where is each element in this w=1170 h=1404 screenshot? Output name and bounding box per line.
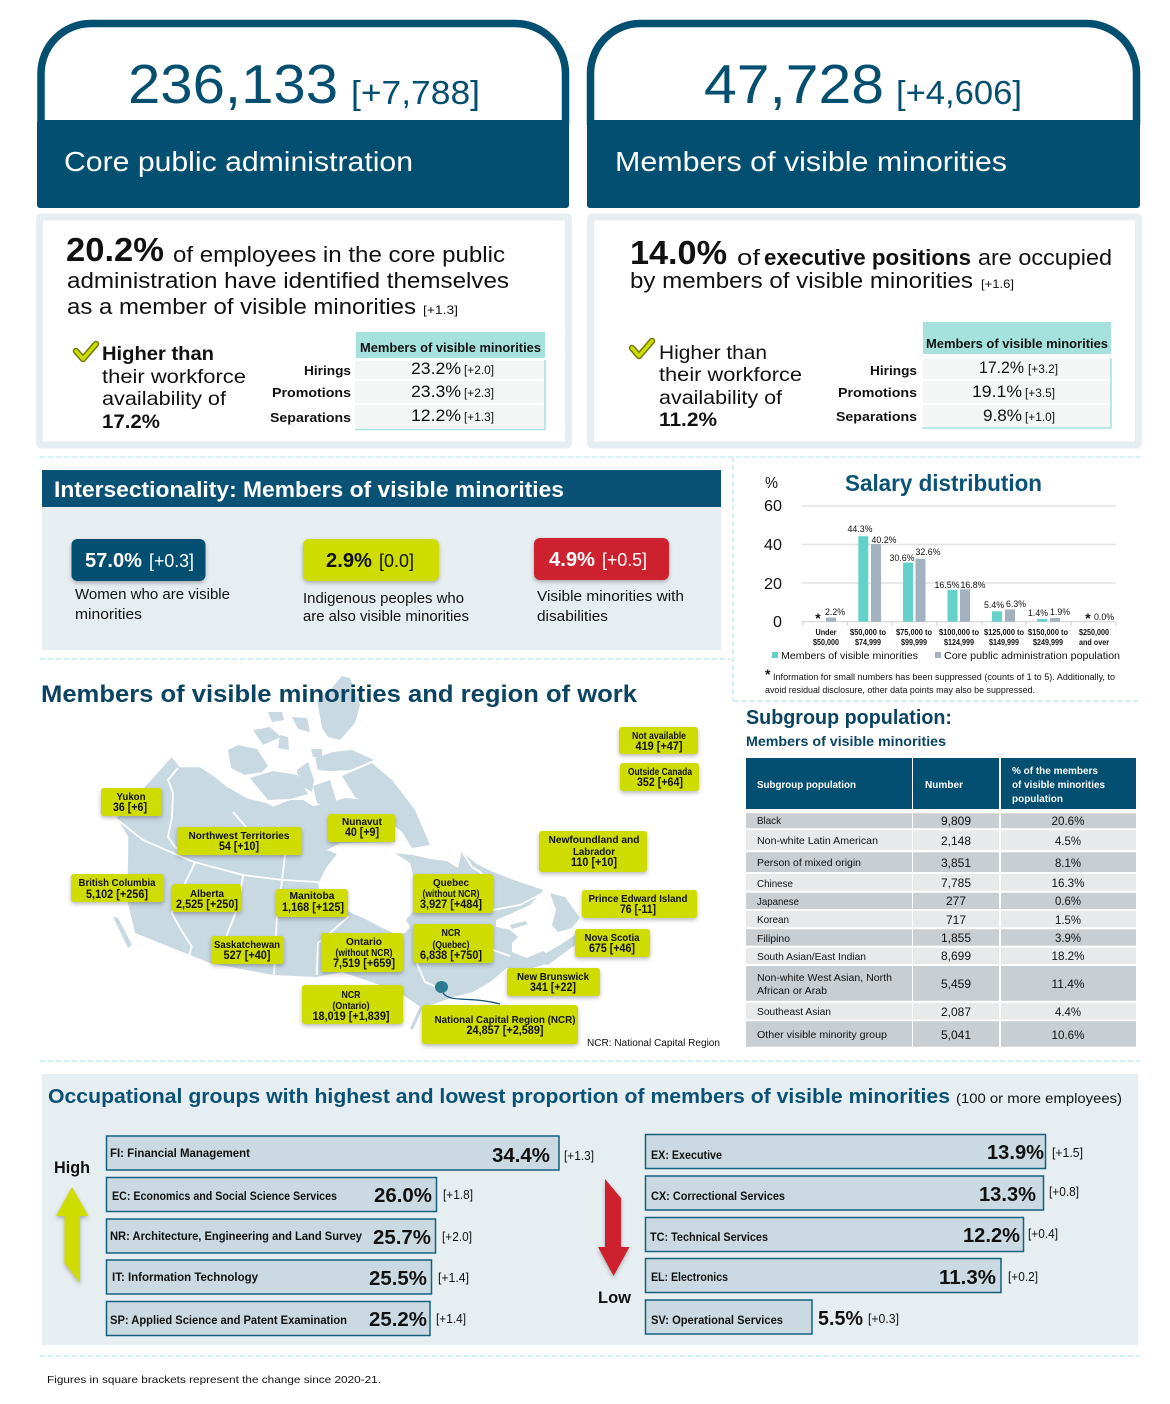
table: subgroups: 10.6% bbox=[1052, 1028, 1085, 1042]
table: subgroups: 18.2% bbox=[1052, 949, 1085, 963]
label: National Capital Region bbox=[422, 1005, 578, 1044]
bar chart: 40 bbox=[764, 537, 782, 554]
label: National Capital Region: National Capital Region (NCR) bbox=[434, 1015, 576, 1026]
footnote: avoid residual disclosure, other data points may also be suppressed. bbox=[765, 685, 1035, 695]
table: subgroups: Other visible minority group bbox=[757, 1029, 887, 1041]
label: Saskatchewan: Saskatchewan bbox=[214, 940, 280, 951]
text block: share of employees bbox=[66, 231, 509, 319]
label: Nunavut: 40 [+9] bbox=[345, 827, 379, 839]
bar chart: highest groups: 26.0% bbox=[374, 1185, 432, 1207]
footnote: Information for small numbers has been suppressed (counts of 1 to 5). Additionally, to bbox=[773, 672, 1115, 682]
stat change: [+7,788] bbox=[351, 74, 480, 111]
label: not available bbox=[619, 727, 698, 754]
footnote: * bbox=[765, 666, 771, 682]
label: not available: 419 [+47] bbox=[636, 741, 683, 753]
stat change: [+4,606] bbox=[896, 74, 1022, 111]
legend: Members of visible minorities bbox=[781, 651, 918, 662]
map of Canada bbox=[113, 676, 580, 1030]
label: Manitoba: Manitoba bbox=[290, 891, 335, 902]
legend: Core public administration population bbox=[944, 651, 1120, 662]
table: hirings promotions separations: Promotions bbox=[272, 386, 351, 400]
table: subgroups: Southeast Asian bbox=[757, 1006, 831, 1018]
table: hirings promotions separations: Hirings bbox=[870, 364, 917, 378]
label: NCR Ontario: 18,019 [+1,839] bbox=[312, 1011, 390, 1023]
bar chart: * bbox=[1085, 610, 1091, 626]
text block: workforce availability: availability of bbox=[102, 388, 227, 410]
heading bbox=[746, 706, 952, 749]
bar chart: $50,000 bbox=[813, 638, 839, 647]
label: NCR Quebec: (Quebec) bbox=[432, 940, 470, 951]
table: hirings promotions separations: [+3.2] bbox=[1028, 364, 1058, 376]
text block: share of executive positions: of bbox=[737, 245, 761, 270]
table: subgroups: 5,459 bbox=[941, 977, 971, 991]
table: subgroups: Korean bbox=[757, 914, 789, 926]
text block: share of executive positions: executive positions bbox=[764, 245, 971, 270]
bar chart: lowest groups: TC: Technical Services bbox=[650, 1230, 768, 1244]
bar chart: $75,000 to bbox=[896, 628, 932, 637]
bar chart: % bbox=[765, 475, 778, 492]
bar chart: $124,999 bbox=[944, 638, 974, 647]
table: subgroups: African or Arab bbox=[757, 985, 827, 997]
table: subgroups: 277 bbox=[946, 894, 966, 908]
bar chart: 6.3% bbox=[1006, 599, 1027, 610]
label: Nunavut: Nunavut bbox=[342, 817, 383, 828]
label: NCR Ontario: (Ontario) bbox=[332, 1001, 370, 1012]
text block: workforce availability bbox=[659, 342, 802, 431]
table: hirings promotions separations bbox=[836, 322, 1111, 428]
text block: workforce availability: Higher than bbox=[659, 342, 767, 364]
bar chart: highest groups: 25.7% bbox=[373, 1227, 431, 1249]
heading: (100 or more employees) bbox=[956, 1091, 1122, 1106]
label: NCR Ontario: NCR bbox=[342, 990, 361, 1001]
stat: disabilities bbox=[534, 538, 684, 625]
table: subgroups: Person of mixed origin bbox=[757, 857, 861, 869]
label: NCR Ontario bbox=[302, 985, 403, 1024]
table: subgroups: 20.6% bbox=[1052, 814, 1085, 828]
label: British Columbia: British Columbia bbox=[78, 878, 156, 889]
table: hirings promotions separations: [+2.3] bbox=[464, 388, 494, 400]
bar chart: $150,000 to bbox=[1028, 628, 1068, 637]
label: Nova Scotia: Nova Scotia bbox=[584, 933, 640, 944]
dividers bbox=[40, 457, 1140, 1356]
table: subgroups: Number bbox=[925, 779, 963, 791]
bar chart: highest groups bbox=[106, 1136, 594, 1336]
bar chart: Under bbox=[816, 628, 836, 637]
bar chart: 1.4% bbox=[1028, 608, 1049, 619]
bar chart: $249,999 bbox=[1033, 638, 1063, 647]
bar chart: $99,999 bbox=[901, 638, 927, 647]
table: subgroups: South Asian/East Indian bbox=[757, 951, 866, 963]
stat: disabilities: [+0.5] bbox=[602, 550, 647, 570]
bar chart: 40.2% bbox=[872, 535, 897, 546]
label: Quebec: Quebec bbox=[433, 878, 469, 889]
table: subgroups: 4.4% bbox=[1055, 1005, 1081, 1019]
label: NCR Quebec: 6,838 [+750] bbox=[420, 950, 482, 962]
heading: Members of visible minorities bbox=[615, 146, 1007, 177]
table: subgroups: % of the members bbox=[1012, 765, 1098, 777]
table: subgroups: Subgroup population bbox=[757, 779, 856, 791]
stat: indigenous peoples: 2.9% bbox=[326, 550, 372, 572]
table: hirings promotions separations: 12.2% bbox=[411, 406, 461, 425]
label: Nova Scotia: 675 [+46] bbox=[589, 943, 635, 955]
bar chart: 0 bbox=[773, 614, 782, 631]
panel: core public administration header bbox=[37, 24, 569, 208]
stat: women: [+0.3] bbox=[149, 551, 194, 571]
text block: share of executive positions bbox=[630, 234, 1112, 293]
table: subgroups: Non-white Latin American bbox=[757, 835, 878, 847]
table: hirings promotions separations: Members of visible minorities bbox=[926, 337, 1108, 351]
label: Newfoundland and Labrador: Newfoundland and bbox=[548, 835, 640, 846]
table: subgroups: 8.1% bbox=[1055, 856, 1081, 870]
arrow: up bbox=[56, 1187, 88, 1283]
note: NCR abbreviation: NCR: National Capital Region bbox=[587, 1038, 720, 1049]
bar chart: highest groups: 34.4% bbox=[492, 1145, 550, 1167]
label: Yukon: Yukon bbox=[116, 792, 146, 803]
bar chart: lowest groups: SV: Operational Services bbox=[651, 1313, 783, 1327]
table: subgroups: 16.3% bbox=[1052, 876, 1085, 890]
table: subgroups: 1,855 bbox=[941, 931, 971, 945]
table: subgroups: 3.9% bbox=[1055, 931, 1081, 945]
table: hirings promotions separations: Members of visible minorities bbox=[360, 341, 541, 355]
table: subgroups: 717 bbox=[946, 913, 966, 927]
label: low: Low bbox=[598, 1289, 631, 1307]
bar chart: 5.4% bbox=[984, 600, 1005, 611]
label: Alberta: Alberta bbox=[190, 889, 224, 900]
bar chart: 2.2% bbox=[825, 607, 846, 618]
label: not available: Not available bbox=[632, 731, 686, 742]
table: hirings promotions separations: [+3.5] bbox=[1025, 388, 1055, 400]
bar chart: lowest groups: [+1.5] bbox=[1052, 1146, 1083, 1160]
label: Alberta: 2,525 [+250] bbox=[176, 899, 238, 911]
table: subgroups: Filipino bbox=[757, 933, 790, 945]
bar chart: highest groups: [+1.4] bbox=[438, 1271, 469, 1285]
table: hirings promotions separations: 19.1% bbox=[972, 382, 1022, 401]
table: subgroups: 11.4% bbox=[1052, 977, 1085, 991]
table: hirings promotions separations: [+2.0] bbox=[464, 365, 494, 377]
label: NCR Quebec: NCR bbox=[442, 928, 461, 939]
label: Newfoundland and Labrador: 110 [+10] bbox=[571, 857, 617, 869]
bar chart: lowest groups bbox=[646, 1134, 1083, 1334]
label: Manitoba bbox=[276, 889, 348, 917]
label: Saskatchewan bbox=[211, 936, 284, 964]
icon: check mark bbox=[632, 341, 652, 356]
bar chart: highest groups: [+1.3] bbox=[564, 1149, 594, 1163]
panel: region of work bbox=[41, 676, 720, 1049]
stat: visible minorities total: 47,728 bbox=[704, 53, 884, 115]
text block: share of executive positions: 14.0% bbox=[630, 234, 727, 271]
bar chart: 16.8% bbox=[960, 580, 986, 591]
bar chart: lowest groups: CX: Correctional Services bbox=[651, 1189, 785, 1203]
text block: workforce availability bbox=[102, 343, 246, 433]
label: British Columbia bbox=[71, 874, 164, 902]
stat: indigenous peoples bbox=[303, 539, 469, 625]
label: Manitoba: 1,168 [+125] bbox=[282, 902, 344, 914]
text block: workforce availability: 11.2% bbox=[659, 409, 717, 431]
label: Nunavut bbox=[328, 814, 395, 842]
table: subgroups: Chinese bbox=[757, 878, 793, 890]
table: hirings promotions separations: 17.2% bbox=[979, 358, 1024, 377]
label: Yukon: 36 [+6] bbox=[113, 802, 147, 814]
label: Alberta bbox=[172, 884, 241, 912]
label: outside Canada: Outside Canada bbox=[628, 767, 692, 778]
text block: workforce availability: their workforce bbox=[102, 366, 246, 388]
table: hirings promotions separations: 23.3% bbox=[411, 382, 461, 401]
label: Ontario bbox=[321, 933, 403, 972]
bar chart: lowest groups: [+0.4] bbox=[1028, 1227, 1058, 1241]
bar chart bbox=[764, 475, 1116, 647]
text block: workforce availability: 17.2% bbox=[102, 411, 160, 433]
text block: share of executive positions: by members of visible minorities bbox=[630, 268, 973, 293]
bar chart: $50,000 to bbox=[850, 628, 886, 637]
bar chart: highest groups: 25.2% bbox=[369, 1309, 427, 1331]
table: subgroups: 1.5% bbox=[1055, 913, 1081, 927]
text block: share of employees: [+1.3] bbox=[423, 303, 458, 317]
stat: women: 57.0% bbox=[85, 550, 142, 572]
bar chart: lowest groups: 13.9% bbox=[987, 1142, 1044, 1164]
label: New Brunswick bbox=[507, 968, 600, 996]
table: subgroups: 9,809 bbox=[941, 814, 971, 828]
table: subgroups bbox=[746, 758, 1136, 1047]
bar chart: $100,000 to bbox=[939, 628, 979, 637]
table: subgroups: 0.6% bbox=[1055, 894, 1081, 908]
bar chart: $125,000 to bbox=[984, 628, 1024, 637]
table: hirings promotions separations: [+1.0] bbox=[1025, 412, 1055, 424]
bar chart: lowest groups: EX: Executive bbox=[651, 1148, 722, 1162]
label: Quebec: (without NCR) bbox=[422, 889, 480, 900]
bar chart: $74,999 bbox=[855, 638, 881, 647]
table: subgroups: 2,087 bbox=[941, 1005, 971, 1019]
bar chart: highest groups: IT: Information Technology bbox=[112, 1270, 258, 1284]
text block: workforce availability: Higher than bbox=[102, 343, 214, 365]
heading: Members of visible minorities bbox=[746, 733, 946, 749]
stat: indigenous peoples: Indigenous peoples who bbox=[303, 591, 464, 607]
icon: check mark bbox=[76, 344, 96, 359]
stat: core public administration total: 236,133 bbox=[128, 53, 338, 115]
legend bbox=[772, 651, 1120, 662]
label: Ontario: 7,519 [+659] bbox=[333, 958, 395, 970]
label: New Brunswick: 341 [+22] bbox=[530, 982, 576, 994]
bar chart: 60 bbox=[764, 498, 782, 515]
label: British Columbia: 5,102 [+256] bbox=[86, 889, 148, 901]
label: NCR Quebec bbox=[413, 924, 493, 963]
bar chart: highest groups: NR: Architecture, Engineering and Land Survey bbox=[110, 1229, 362, 1243]
table: hirings promotions separations: [+1.3] bbox=[464, 412, 494, 424]
table: subgroups: population bbox=[1012, 793, 1063, 805]
panel: executive positions bbox=[590, 217, 1138, 445]
text block: share of employees: administration have identified themselves bbox=[67, 268, 509, 293]
panel: visible minorities header bbox=[587, 23, 1140, 208]
bar chart: 0.0% bbox=[1094, 612, 1115, 623]
label: outside Canada bbox=[620, 763, 699, 791]
bar chart: lowest groups: 11.3% bbox=[939, 1267, 996, 1289]
panel: occupational groups bbox=[42, 1074, 1138, 1345]
bar chart: highest groups: 25.5% bbox=[369, 1268, 427, 1290]
text block: share of executive positions: [+1.6] bbox=[981, 277, 1014, 291]
table: subgroups: Black bbox=[757, 815, 782, 827]
label: New Brunswick: New Brunswick bbox=[517, 972, 589, 983]
bar chart: 20 bbox=[764, 576, 782, 593]
stat: women: minorities bbox=[75, 607, 142, 623]
stat: disabilities: Visible minorities with bbox=[537, 589, 684, 605]
label: Northwest Territories: 54 [+10] bbox=[219, 841, 259, 853]
text block: workforce availability: their workforce bbox=[659, 364, 802, 386]
bar chart: lowest groups: [+0.3] bbox=[868, 1312, 899, 1326]
bar chart: lowest groups: 5.5% bbox=[818, 1308, 863, 1330]
heading: Intersectionality: Members of visible minorities bbox=[54, 477, 564, 502]
table: subgroups: 3,851 bbox=[941, 856, 971, 870]
bar chart: highest groups: [+1.8] bbox=[443, 1188, 473, 1202]
heading: Salary distribution bbox=[845, 470, 1042, 496]
bar chart: lowest groups: 12.2% bbox=[963, 1225, 1020, 1247]
bar chart: $149,999 bbox=[989, 638, 1019, 647]
bar chart: 32.6% bbox=[916, 547, 941, 558]
footnote bbox=[765, 666, 1115, 695]
heading: Members of visible minorities and region of work bbox=[41, 681, 638, 708]
stat: indigenous peoples: [0.0] bbox=[379, 551, 414, 571]
bar chart: $250,000 bbox=[1079, 628, 1109, 637]
label: Ontario: Ontario bbox=[346, 937, 382, 948]
bar chart: highest groups: EC: Economics and Social Science Services bbox=[112, 1189, 337, 1203]
panel: salary distribution bbox=[764, 470, 1120, 695]
text block: share of employees: as a member of visible minorities bbox=[67, 294, 416, 319]
table: subgroups: 2,148 bbox=[941, 834, 971, 848]
label: Ontario: (without NCR) bbox=[336, 948, 392, 959]
text block: share of employees: 20.2% bbox=[66, 231, 164, 268]
stat: indigenous peoples: are also visible minorities bbox=[303, 609, 469, 625]
label: Prince Edward Island: Prince Edward Island bbox=[588, 894, 688, 905]
bar chart: lowest groups: EL: Electronics bbox=[651, 1270, 728, 1284]
text block: workforce availability: availability of bbox=[659, 387, 783, 409]
icon: national capital region marker bbox=[435, 981, 500, 1004]
panel: intersectionality bbox=[42, 470, 721, 650]
table: subgroups: 4.5% bbox=[1055, 834, 1081, 848]
table: subgroups: 7,785 bbox=[941, 876, 971, 890]
bar chart: highest groups: [+2.0] bbox=[442, 1230, 472, 1244]
label: Saskatchewan: 527 [+40] bbox=[224, 950, 271, 962]
label: Prince Edward Island bbox=[582, 890, 697, 918]
stat: disabilities: disabilities bbox=[537, 609, 608, 625]
bar chart: highest groups: SP: Applied Science and Patent Examination bbox=[110, 1313, 347, 1327]
bar chart: 1.9% bbox=[1050, 607, 1071, 618]
label: Quebec: 3,927 [+484] bbox=[420, 899, 482, 911]
bar chart: lowest groups: [+0.8] bbox=[1049, 1185, 1079, 1199]
table: hirings promotions separations: Separations bbox=[270, 411, 351, 425]
stat: women bbox=[72, 539, 230, 623]
table: subgroups: of visible minorities bbox=[1012, 779, 1105, 791]
table: hirings promotions separations: Separations bbox=[836, 410, 917, 424]
stat: disabilities: 4.9% bbox=[549, 549, 595, 571]
label: Nova Scotia bbox=[575, 929, 650, 957]
panel: subgroup population bbox=[746, 706, 1136, 1047]
footnote: square brackets: Figures in square brackets represent the change since 2020-21. bbox=[47, 1374, 381, 1386]
bar chart: and over bbox=[1079, 638, 1109, 647]
label: Northwest Territories: Northwest Territories bbox=[188, 831, 290, 842]
bar chart: lowest groups: [+0.2] bbox=[1008, 1270, 1038, 1284]
table: subgroups: Non-white West Asian, North bbox=[757, 972, 892, 984]
table: subgroups: 5,041 bbox=[941, 1028, 971, 1042]
label: Newfoundland and Labrador bbox=[539, 831, 647, 872]
bar chart: * bbox=[815, 610, 821, 626]
label: Quebec bbox=[413, 874, 493, 913]
table: hirings promotions separations bbox=[270, 332, 545, 430]
label: National Capital Region: 24,857 [+2,589] bbox=[466, 1025, 544, 1037]
table: subgroups: 8,699 bbox=[941, 949, 971, 963]
text block: share of employees: of employees in the core public bbox=[173, 242, 505, 267]
heading: Core public administration bbox=[64, 146, 413, 177]
label: Prince Edward Island: 76 [-11] bbox=[620, 904, 656, 916]
table: subgroups: Japanese bbox=[757, 896, 799, 908]
text block: share of executive positions: are occupied bbox=[978, 245, 1112, 270]
bar chart: lowest groups: 13.3% bbox=[979, 1184, 1036, 1206]
bar chart: 44.3% bbox=[848, 524, 873, 535]
bar chart: 30.6% bbox=[890, 553, 915, 564]
table: hirings promotions separations: 9.8% bbox=[983, 406, 1022, 425]
arrow: down bbox=[598, 1179, 630, 1276]
bar chart: 16.5% bbox=[934, 580, 960, 591]
table: hirings promotions separations: Promotions bbox=[838, 386, 917, 400]
bar chart: highest groups: FI: Financial Management bbox=[110, 1146, 250, 1160]
label: Northwest Territories bbox=[177, 827, 302, 855]
heading: Subgroup population: bbox=[746, 706, 952, 729]
label: outside Canada: 352 [+64] bbox=[637, 777, 683, 789]
label: Newfoundland and Labrador: Labrador bbox=[573, 847, 615, 858]
table: hirings promotions separations: Hirings bbox=[304, 364, 351, 378]
label: Yukon bbox=[101, 788, 162, 816]
stat: women: Women who are visible bbox=[75, 587, 230, 603]
bar chart: highest groups: [+1.4] bbox=[436, 1312, 466, 1326]
label: high: High bbox=[54, 1159, 90, 1177]
panel: employee share bbox=[40, 217, 568, 445]
heading: Occupational groups with highest and lowest proportion of members of visible minorities bbox=[48, 1085, 950, 1108]
table: hirings promotions separations: 23.2% bbox=[411, 359, 461, 378]
